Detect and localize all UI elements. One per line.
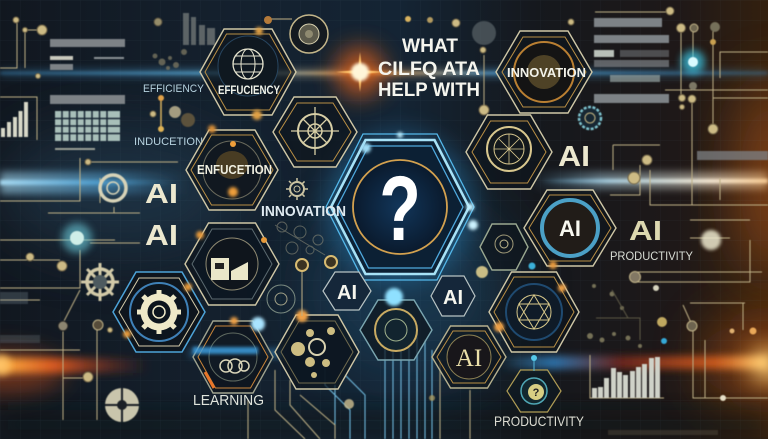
panel: lower left circuitry	[0, 223, 140, 422]
flare: top centre	[336, 48, 384, 96]
panel: AI hexagon right	[524, 190, 616, 269]
panel: top right data widgets	[405, 7, 768, 205]
chart: bars	[1, 102, 28, 137]
text: AI left upper: AI	[145, 178, 178, 209]
panel: AI hexagon small left: AI	[337, 282, 357, 304]
speckled circuit detail	[587, 284, 642, 348]
panel: ring hexagon centre	[360, 288, 432, 360]
panel: AI hexagon small centre: AI	[443, 287, 463, 309]
panel: script AI hexagon: AI	[456, 345, 482, 372]
icon: top mini chart	[183, 13, 215, 45]
flare: right edge	[0, 349, 768, 381]
panel: title: HELP WITH	[378, 80, 480, 101]
chart: rising bars	[592, 357, 660, 398]
panel: script AI hexagon	[432, 326, 506, 388]
icon: gear	[81, 263, 119, 301]
panel: efficiency hexagon	[200, 27, 296, 120]
icon: top right-of-centre gear ring	[264, 15, 328, 53]
text: learning label: LEARNING	[193, 393, 264, 409]
panel: innovation hexagon	[496, 31, 592, 113]
panel: connector nodes above hub	[267, 256, 337, 316]
icon: small gear near innovation	[286, 178, 308, 200]
text: productivity label right: PRODUCTIVITY	[610, 249, 693, 263]
panel: question hexagon small: ?	[533, 387, 540, 399]
panel: title: WHAT	[402, 36, 458, 57]
icon: ring	[100, 175, 126, 201]
text: efficiency label: EFFICIENCY	[143, 83, 205, 95]
panel: question hexagon small	[507, 355, 561, 412]
text: AI right lower: AI	[629, 215, 662, 246]
panel: learning hexagon	[193, 317, 273, 393]
text: AI right upper: AI	[558, 141, 590, 173]
label: EFFUCIENCY	[218, 85, 280, 97]
text: innovation label: INNOVATION	[261, 203, 346, 220]
panel: AI hexagon right: AI	[559, 216, 581, 241]
icon: pictogram	[211, 258, 229, 280]
panel: gear hexagon	[273, 97, 357, 167]
data table	[55, 111, 120, 141]
label: INNOVATION	[507, 65, 586, 80]
icon: question mark: ?	[379, 158, 421, 260]
light streaks	[0, 69, 768, 373]
connector lines	[0, 20, 178, 213]
panel: hub hexagon	[275, 310, 359, 389]
icon: clutter	[152, 49, 187, 70]
icon: wheel	[105, 388, 139, 422]
panel: square icon hexagon	[185, 223, 279, 305]
panel: bottom centre circuit traces	[248, 320, 470, 439]
panel: target hexagon	[468, 220, 528, 270]
text: AI left lower: AI	[145, 220, 178, 252]
text: productivity label bottom: PRODUCTIVITY	[494, 413, 585, 429]
icon: glowing node	[62, 223, 92, 253]
panel: gear hexagon lower left	[113, 272, 205, 352]
data rows	[594, 18, 768, 160]
panel: AI hexagon small centre	[431, 276, 475, 316]
panel: title	[378, 36, 480, 101]
panel: AI hexagon small left	[323, 272, 371, 310]
data bars	[50, 39, 125, 47]
icon: linked rings	[220, 359, 249, 373]
text: induction label: INDUCETION	[134, 136, 203, 148]
panel: lower right circuitry	[476, 220, 768, 435]
icon: circuit cluster	[275, 222, 325, 255]
icon: glowing blue node	[681, 50, 705, 74]
panel: title: CILFQ ATA	[378, 59, 480, 80]
panel: network hexagon	[489, 272, 579, 352]
icon: teal cog	[579, 107, 601, 129]
label: ENFUCETION	[197, 162, 272, 177]
icon: gear	[137, 290, 181, 334]
panel: enfucation hexagon	[186, 125, 278, 210]
panel: left data widgets	[0, 13, 215, 213]
panel: compass hexagon	[466, 115, 552, 189]
panel: central question hexagon	[324, 131, 476, 283]
